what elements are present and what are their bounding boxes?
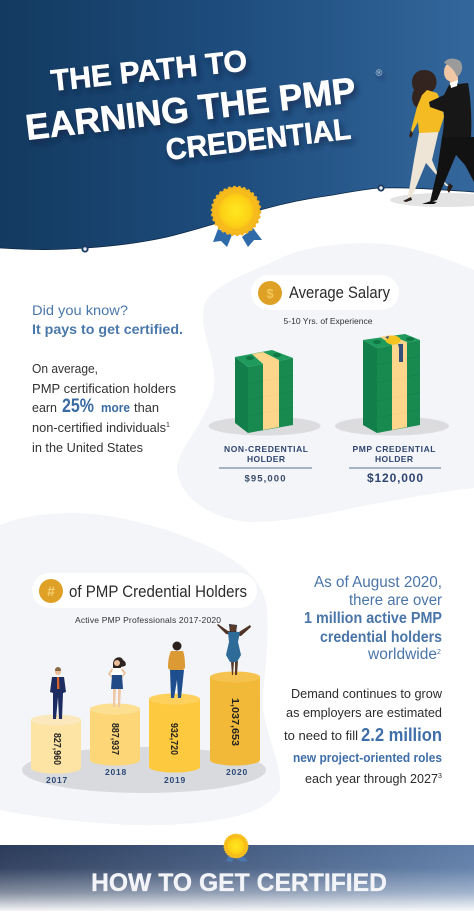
ground shadow: [390, 193, 474, 207]
medal on stack: [385, 336, 403, 362]
average salary pill: Average Salary: [289, 283, 390, 302]
year labels: 2020: [226, 767, 248, 777]
salary paragraph: earn: [32, 401, 57, 415]
year labels: [46, 767, 248, 785]
hash coin icon: #: [47, 583, 55, 599]
demand text: each year through 2027: [305, 771, 438, 786]
title: ®: [375, 67, 383, 78]
money stack: non-credential: [208, 350, 320, 436]
label: non-credential holder: [219, 444, 312, 484]
label: non-credential holder: $95,000: [244, 474, 286, 484]
cylinder 2019: [149, 694, 200, 772]
average salary pill: [251, 275, 399, 310]
demand text: 2.2 million: [361, 725, 442, 745]
active holders text: [304, 574, 442, 663]
woman: [403, 70, 453, 202]
small medal icon: [224, 834, 248, 862]
salary paragraph: PMP certification holders: [32, 382, 176, 396]
salary paragraph: 25%: [62, 396, 94, 417]
dollar coin icon: $: [266, 286, 274, 301]
title: THE PATH TO: [49, 45, 249, 98]
active holders text: 2: [437, 649, 441, 656]
year labels: 2018: [105, 767, 127, 777]
how to get certified banner: [0, 834, 474, 911]
podium shadow: [22, 747, 266, 793]
dollar coin icon: [258, 281, 282, 305]
header banner: [0, 0, 474, 260]
cylinder 2019: 932,720: [168, 723, 180, 755]
active holders text: worldwide: [367, 646, 437, 663]
label: non-credential holder: HOLDER: [247, 454, 285, 464]
credential holders pill: [32, 573, 257, 608]
person 2017: [50, 667, 66, 719]
wave marker right: [377, 184, 385, 192]
walking couple illustration: [390, 59, 474, 207]
man: [422, 59, 474, 204]
background blob: salary: [177, 243, 474, 522]
active holders text: As of August 2020,: [314, 574, 442, 591]
person 2019: [168, 642, 185, 698]
medal ribbons: [213, 228, 262, 247]
year labels: 2017: [46, 775, 68, 785]
cylinder 2017: [31, 714, 81, 774]
cylinder 2017: 827,960: [51, 733, 63, 765]
salary paragraph: more: [101, 401, 130, 415]
cylinder 2020: 1,037,653: [229, 698, 241, 746]
demand text: to need to fill: [284, 729, 358, 743]
experience caption: 5-10 Yrs. of Experience: [284, 316, 373, 326]
demand text: new project-oriented roles: [293, 751, 442, 765]
podium chart: [22, 624, 266, 793]
cylinder 2018: [90, 704, 140, 766]
hash coin icon: [39, 579, 63, 603]
background blob: holders: [0, 513, 280, 825]
holders caption: Active PMP Professionals 2017-2020: [75, 615, 221, 625]
active holders text: credential holders: [320, 629, 442, 646]
active holders text: 1 million active PMP: [304, 610, 442, 627]
label: PMP credential holder: HOLDER: [375, 454, 413, 464]
title: CREDENTIAL: [164, 113, 353, 167]
person 2018: [108, 657, 126, 707]
demand text: as employers are estimated: [286, 705, 442, 720]
person 2020: [217, 624, 251, 675]
wave marker left: [81, 245, 89, 253]
cylinder 2020: [210, 672, 260, 766]
salary paragraph: 1: [166, 422, 170, 429]
large medal icon: [212, 187, 262, 247]
title: EARNING THE PMP: [23, 69, 358, 148]
label: PMP credential holder: $120,000: [367, 471, 423, 485]
salary paragraph: non-certified individuals: [32, 421, 166, 435]
cylinder 2018: 887,937: [109, 723, 121, 755]
salary paragraph: On average,: [32, 362, 98, 376]
demand text: Demand continues to grow: [291, 686, 443, 701]
credential holders pill: of PMP Credential Holders: [69, 582, 247, 601]
title: [23, 45, 383, 167]
salary paragraph: in the United States: [32, 441, 143, 455]
demand text: [284, 686, 443, 786]
demand text: 3: [438, 773, 442, 780]
did you know heading: Did you know?: [32, 302, 128, 318]
label: PMP credential holder: [349, 444, 441, 485]
did you know heading: [32, 302, 183, 337]
medal disc: [212, 187, 260, 235]
label: non-credential holder: NON-CREDENTIAL: [224, 444, 308, 454]
how to get certified banner: HOW TO GET CERTIFIED: [91, 869, 387, 897]
year labels: 2019: [164, 775, 186, 785]
active holders text: there are over: [349, 592, 442, 609]
money stack: PMP credential: [335, 334, 449, 436]
salary paragraph: than: [134, 401, 159, 415]
salary paragraph: [32, 362, 176, 455]
label: PMP credential holder: PMP CREDENTIAL: [352, 444, 436, 454]
did you know heading: It pays to get certified.: [32, 321, 183, 337]
